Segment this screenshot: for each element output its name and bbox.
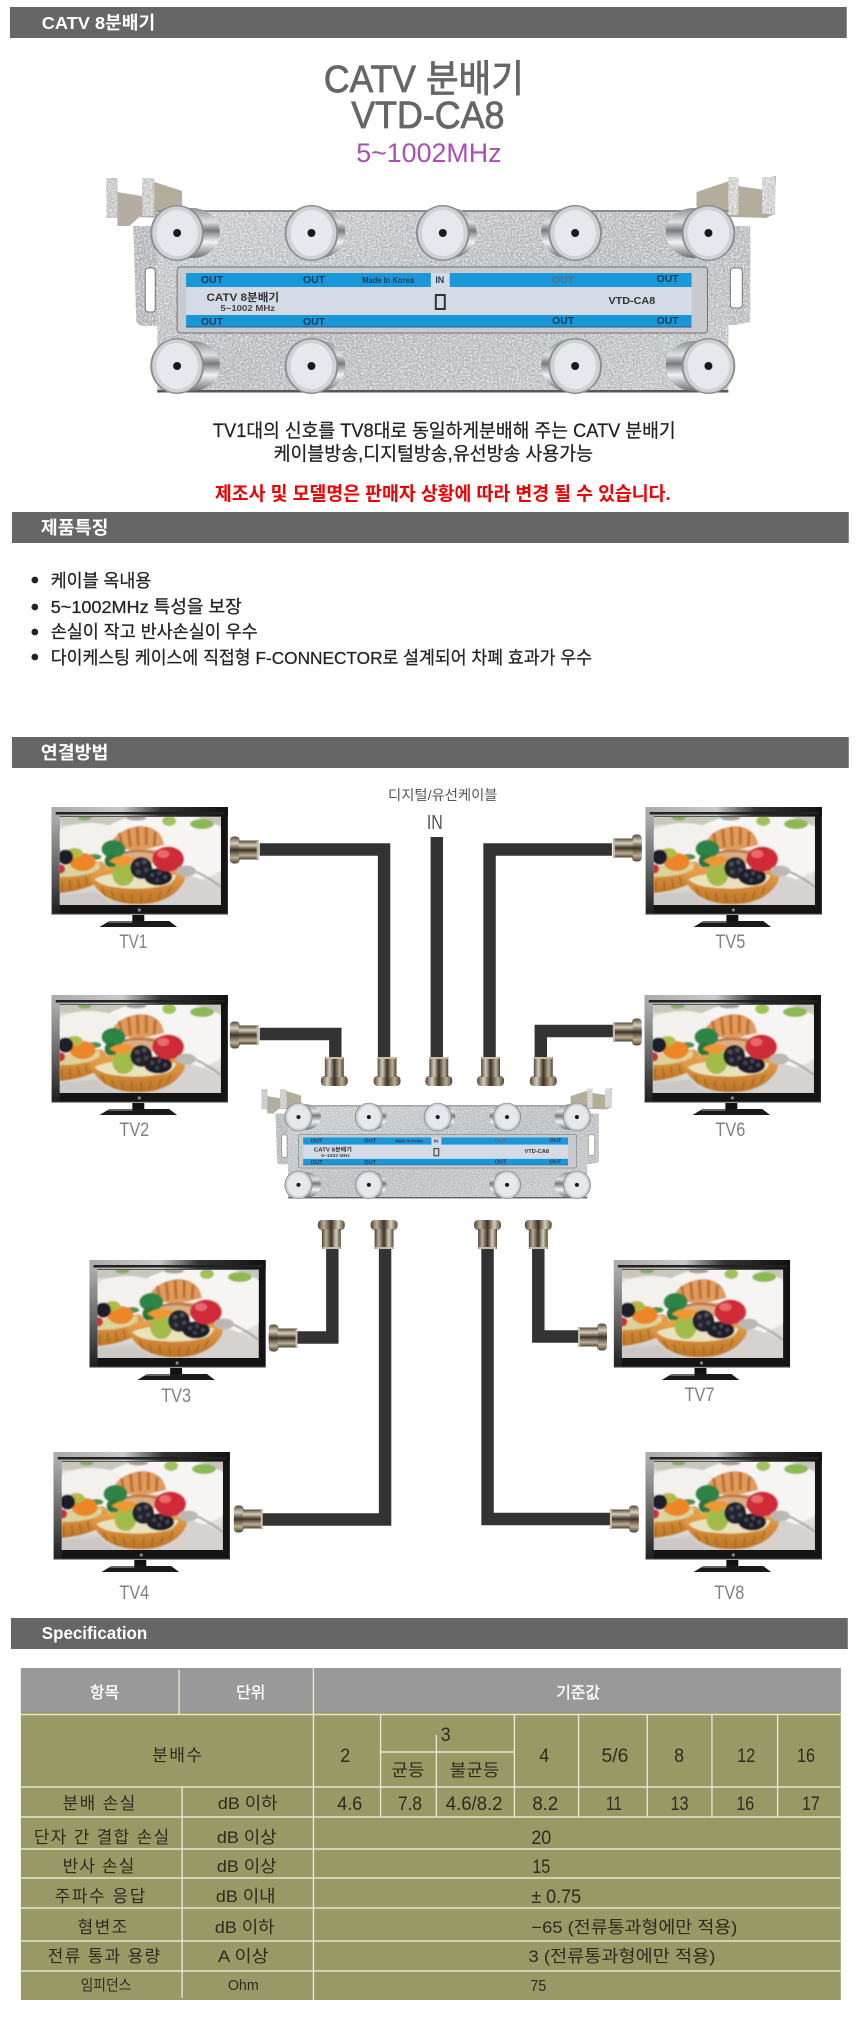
banner: 연결방법 (12, 737, 849, 768)
cable label: 디지털/유선케이블 (388, 787, 498, 803)
splitter label text: OUT (549, 1159, 562, 1165)
row: 분배수: 12 (737, 1746, 755, 1767)
row: 반사 손실: 반사 손실 (63, 1857, 134, 1876)
table header (21, 1668, 841, 1712)
banner: Specification (11, 1618, 848, 1649)
cable: TV1 (230, 836, 400, 1086)
row: 임피던스: 임피던스 (81, 1977, 131, 1994)
row: 임피던스: 75 (530, 1978, 546, 1995)
row: 혐변조: dB 이하 (215, 1918, 275, 1937)
banner: Specification: Specification (42, 1623, 147, 1643)
table header: 기준값 (556, 1684, 600, 1702)
device label text: Made In Korea (362, 276, 414, 285)
TV3: TV3 (161, 1386, 191, 1407)
splitter label text: 5~1002 MHz (321, 1153, 351, 1158)
notice in red: 제조사 및 모델명은 판매자 상황에 따라 변경 될 수 있습니다. (215, 483, 671, 505)
row: 전류 통과 용량: A 이상 (218, 1947, 269, 1966)
TV4: TV4 (119, 1583, 149, 1604)
device label text: OUT (552, 316, 575, 327)
row: 분배수: 16 (797, 1746, 815, 1767)
intro text: 케이블방송,디지털방송,유선방송 사용가능 (274, 443, 593, 465)
TV4 (54, 1452, 237, 1604)
row: 전류 통과 용량: 3 (전류통과형에만 적용) (528, 1947, 715, 1966)
row: 분배 손실: 13 (671, 1794, 689, 1815)
feature list: 손실이 작고 반사손실이 우수 (51, 622, 258, 642)
row: 혐변조: 혐변조 (78, 1918, 127, 1937)
intro text (213, 420, 676, 465)
banner: 제품특징: 제품특징 (41, 518, 108, 538)
feature list (31, 571, 592, 668)
row: 분배 손실: 4.6 (337, 1794, 362, 1815)
feature list: 다이케스팅 케이스에 직접형 F-CONNECTOR로 설계되어 차폐 효과가 우수 (51, 648, 592, 668)
device label text: OUT (201, 275, 224, 286)
table header: 단위 (236, 1684, 265, 1702)
splitter label text: VTD-CA8 (525, 1149, 549, 1155)
device label text: OUT (303, 275, 326, 286)
banner: CATV 8분배기 (10, 7, 847, 38)
splitter label text: OUT (495, 1139, 507, 1145)
TV5 (646, 807, 829, 953)
splitter label text (311, 1138, 562, 1166)
device label text: VTD-CA8 (608, 296, 655, 307)
splitter label text: CATV 8분배기 (314, 1146, 352, 1154)
product photo: splitter (106, 176, 776, 394)
row: 전류 통과 용량: 전류 통과 용량 (48, 1947, 160, 1966)
device label text: OUT (657, 316, 679, 327)
device label text: OUT (201, 317, 224, 328)
row: 분배수: 5/6 (601, 1746, 628, 1767)
title: VTD-CA8 (351, 95, 504, 137)
feature list: 케이블 옥내용 (51, 571, 151, 591)
splitter label text: OUT (495, 1159, 507, 1165)
row: 분배수 (152, 1725, 815, 1780)
TV2: TV2 (119, 1120, 149, 1141)
cable: TV7 (525, 1220, 607, 1350)
TV8: TV8 (714, 1583, 744, 1604)
row: 분배수: 3 (441, 1725, 451, 1746)
row: 반사 손실: 15 (532, 1857, 550, 1878)
specification table (21, 1668, 841, 2000)
row: 분배수: 4 (539, 1746, 549, 1767)
table header: 항목 (90, 1684, 119, 1702)
row: 혐변조 (78, 1918, 737, 1937)
banner: 연결방법: 연결방법 (41, 743, 108, 763)
TV1 (52, 807, 235, 953)
row: 분배 손실 (63, 1794, 820, 1815)
cable: TV8 (474, 1220, 639, 1532)
TV6 (645, 995, 828, 1141)
row: 단자 간 결합 손실: dB 이상 (217, 1828, 277, 1847)
IN label: IN (427, 812, 443, 834)
row: 단자 간 결합 손실: 단자 간 결합 손실 (34, 1828, 169, 1847)
connection diagram (52, 787, 829, 1604)
device label text: CATV 8분배기 (206, 290, 279, 304)
device label text: OUT (657, 274, 679, 285)
splitter in diagram (261, 1088, 612, 1199)
row: 주파수 응답: ± 0.75 (531, 1887, 581, 1908)
device label text: 5~1002 MHz (220, 303, 275, 313)
cable: TV3 (269, 1220, 345, 1352)
TV1: TV1 (119, 932, 147, 953)
frequency range: 5~1002MHz (356, 138, 501, 168)
cable: TV6 (530, 1018, 642, 1086)
TV8 (646, 1452, 829, 1604)
row: 분배 손실: 7.8 (398, 1794, 422, 1815)
intro text: TV1대의 신호를 TV8대로 동일하게분배해 주는 CATV 분배기 (213, 420, 676, 442)
feature list: 5~1002MHz 특성을 보장 (51, 597, 242, 617)
TV5: TV5 (715, 932, 745, 953)
row: 분배수: 분배수 (152, 1746, 202, 1765)
device label text: OUT (303, 317, 326, 328)
row: 반사 손실: dB 이상 (217, 1857, 277, 1876)
row: 임피던스 (81, 1977, 546, 1995)
device label text (201, 274, 679, 328)
row: 단자 간 결합 손실 (34, 1828, 551, 1849)
splitter label text: Made In Korea (395, 1139, 423, 1144)
splitter label text: OUT (311, 1160, 323, 1166)
row: 분배 손실: 8.2 (532, 1794, 558, 1815)
TV6: TV6 (715, 1120, 745, 1141)
banner: 제품특징 (12, 512, 849, 543)
title (324, 59, 524, 137)
row: 분배 손실: 16 (736, 1794, 754, 1815)
cable: TV4 (234, 1220, 398, 1532)
TV7 (614, 1260, 797, 1406)
row: 분배수: 불균등 (450, 1761, 500, 1780)
row: 분배 손실: 11 (606, 1794, 622, 1815)
TV7: TV7 (685, 1385, 714, 1406)
TV2 (52, 995, 235, 1141)
row: 단자 간 결합 손실: 20 (531, 1828, 551, 1849)
TV3 (90, 1260, 273, 1407)
cable: IN (425, 837, 452, 1086)
row: 혐변조: −65 (전류통과형에만 적용) (531, 1918, 737, 1937)
row: 분배수: 2 (340, 1746, 350, 1767)
splitter label text: OUT (364, 1139, 377, 1145)
row: 주파수 응답: dB 이내 (216, 1887, 276, 1906)
splitter label text: OUT (311, 1139, 323, 1145)
row: 분배수: 균등 (392, 1761, 424, 1780)
row: 주파수 응답: 주파수 응답 (55, 1887, 145, 1906)
device label text: OUT (552, 275, 575, 286)
title: CATV 분배기 (324, 59, 524, 101)
splitter label text: OUT (549, 1138, 562, 1144)
splitter label text: IN (434, 1139, 439, 1144)
row: 전류 통과 용량 (48, 1947, 715, 1966)
row: 주파수 응답 (55, 1887, 581, 1908)
cable: TV2 (230, 1022, 348, 1086)
row: 임피던스: Ohm (228, 1977, 259, 1994)
row: 분배수: 8 (674, 1746, 684, 1767)
row: 분배 손실: 4.6/8.2 (446, 1794, 502, 1815)
row: 분배 손실: dB 이하 (218, 1794, 278, 1813)
device label text: IN (435, 275, 444, 285)
row: 분배 손실: 17 (802, 1794, 820, 1815)
splitter label text: OUT (364, 1160, 377, 1166)
row: 분배 손실: 분배 손실 (63, 1794, 135, 1813)
cable: TV5 (477, 834, 642, 1086)
row: 반사 손실 (63, 1857, 550, 1878)
banner: CATV 8분배기: CATV 8분배기 (42, 13, 155, 33)
